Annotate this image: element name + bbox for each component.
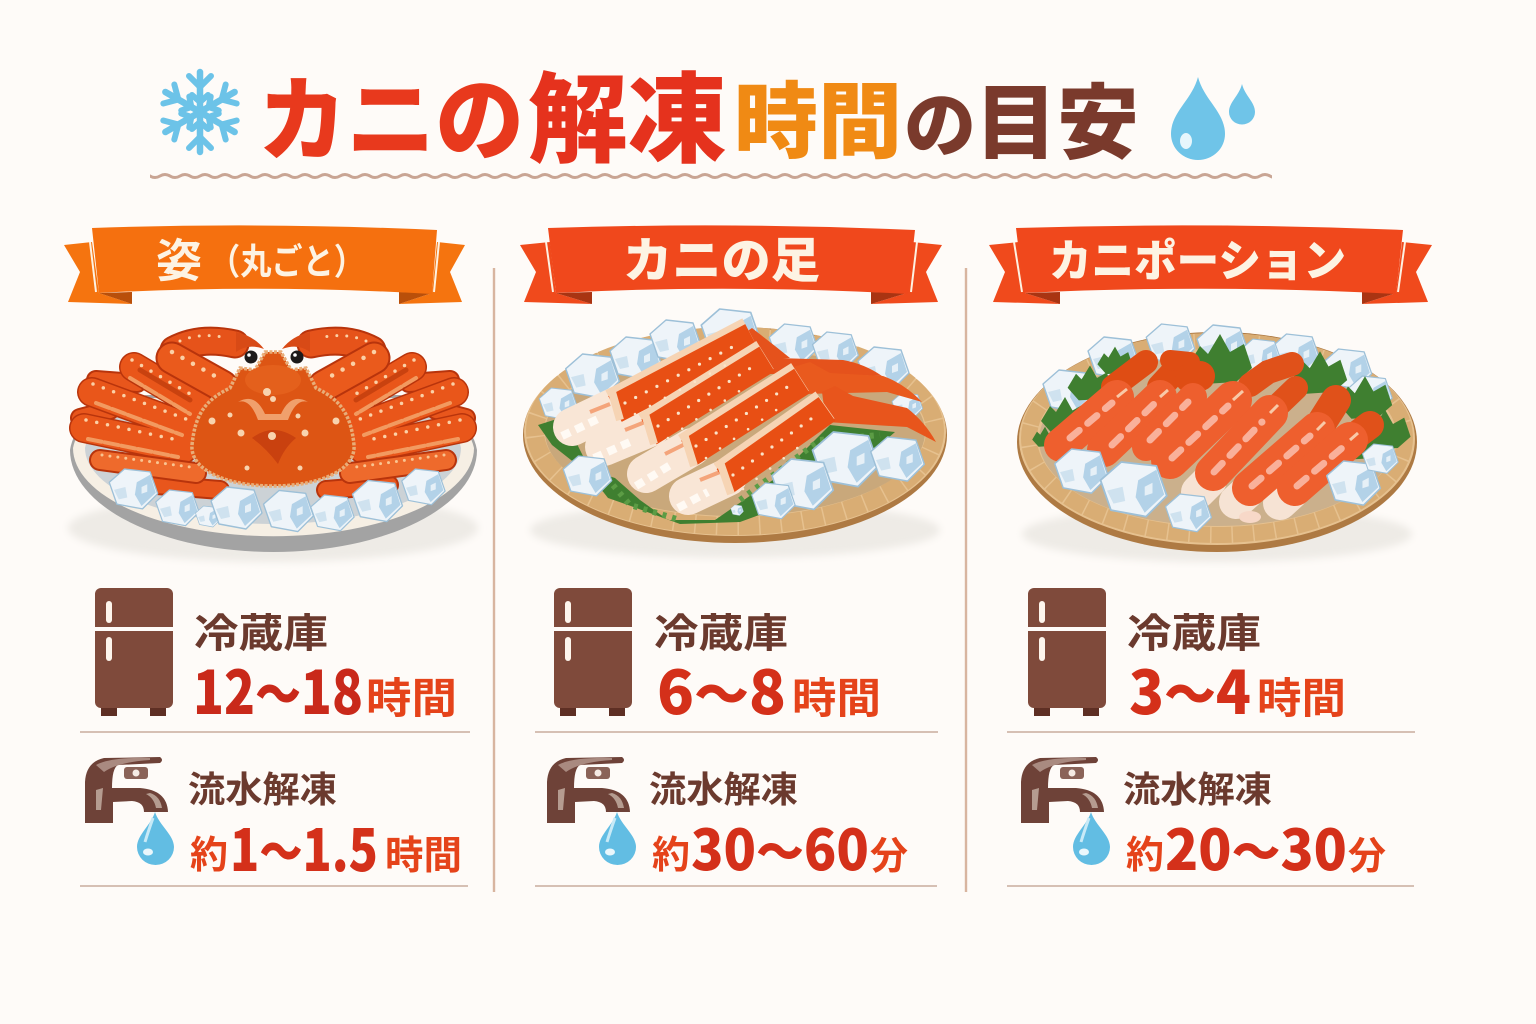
- running water thawing time: [1123, 761, 1386, 887]
- banner: crab portions: カニポーション: [1049, 225, 1346, 289]
- banner: crab legs: カニの足: [623, 221, 820, 291]
- refrigerator thawing time: [1127, 601, 1346, 732]
- icon: refrigerator: [554, 588, 632, 716]
- title wavy underline: [150, 170, 1272, 182]
- banner: crab portions: [989, 225, 1432, 304]
- title text: の: [904, 87, 976, 167]
- running water thawing time: 分: [1348, 825, 1386, 880]
- icon: faucet with drop: [1021, 757, 1110, 865]
- refrigerator thawing time: 時間: [1257, 665, 1346, 726]
- refrigerator thawing time: 冷蔵庫: [1127, 601, 1261, 659]
- cream ends: [1198, 480, 1292, 503]
- title block: [150, 65, 1272, 182]
- title text: 時間: [734, 76, 902, 169]
- refrigerator thawing time: [193, 601, 457, 732]
- shells: [613, 333, 750, 405]
- running water thawing time: 30〜60: [691, 806, 869, 887]
- refrigerator thawing time: 冷蔵庫: [654, 601, 788, 659]
- speckles: [625, 342, 815, 475]
- running water thawing time: 約: [652, 824, 690, 879]
- title text: 解凍: [528, 65, 727, 175]
- icon: refrigerator: [1028, 588, 1106, 716]
- title text: 目安: [975, 79, 1139, 170]
- panel: whole crab: [64, 225, 478, 888]
- title text: [258, 65, 1139, 175]
- running water thawing time: 分: [870, 825, 908, 880]
- running water thawing time: 1〜1.5: [230, 804, 378, 888]
- running water thawing time: 時間: [385, 825, 462, 881]
- refrigerator thawing time: 冷蔵庫: [194, 601, 328, 659]
- collars: [612, 392, 731, 494]
- refrigerator thawing time: 時間: [366, 665, 457, 726]
- refrigerator thawing time: 12〜18: [193, 645, 363, 732]
- shell tips: [1113, 362, 1146, 387]
- panel: crab portions: [989, 225, 1432, 887]
- icon: water drops: [1171, 77, 1255, 160]
- refrigerator thawing time: 6〜8: [657, 645, 786, 732]
- running water thawing time: 流水解凍: [1123, 761, 1272, 813]
- illustration: crab portions on bamboo tray: [1017, 324, 1417, 562]
- banner: whole crab: 姿: [156, 225, 202, 291]
- illustration: whole crab on plate with ice: [68, 332, 478, 562]
- salmon bodies: [1061, 397, 1117, 445]
- icon: refrigerator: [95, 588, 173, 716]
- running water thawing time: 流水解凍: [188, 761, 337, 813]
- claws and joints: [746, 328, 790, 360]
- column dividers: [494, 268, 966, 892]
- refrigerator thawing time: [654, 601, 881, 732]
- running water thawing time: [649, 761, 908, 887]
- refrigerator thawing time: 3〜4: [1129, 645, 1251, 732]
- panel: crab legs: [520, 221, 947, 887]
- icon: snowflake: [160, 72, 240, 152]
- icon: faucet with drop: [547, 757, 636, 865]
- illustration: crab legs on bamboo tray: [523, 309, 947, 558]
- banner: whole crab: [64, 225, 465, 304]
- running water thawing time: 約: [1126, 824, 1164, 879]
- banner: crab legs: [520, 221, 942, 304]
- icon: faucet with drop: [85, 757, 174, 865]
- banner: whole crab: （丸ごと）: [209, 233, 365, 285]
- running water thawing time: [188, 761, 462, 888]
- refrigerator thawing time: 時間: [792, 665, 881, 726]
- running water thawing time: 約: [190, 824, 228, 879]
- running water thawing time: 流水解凍: [649, 761, 798, 813]
- title text: カニの: [258, 71, 524, 173]
- running water thawing time: 20〜30: [1165, 806, 1347, 887]
- meat: [572, 405, 618, 427]
